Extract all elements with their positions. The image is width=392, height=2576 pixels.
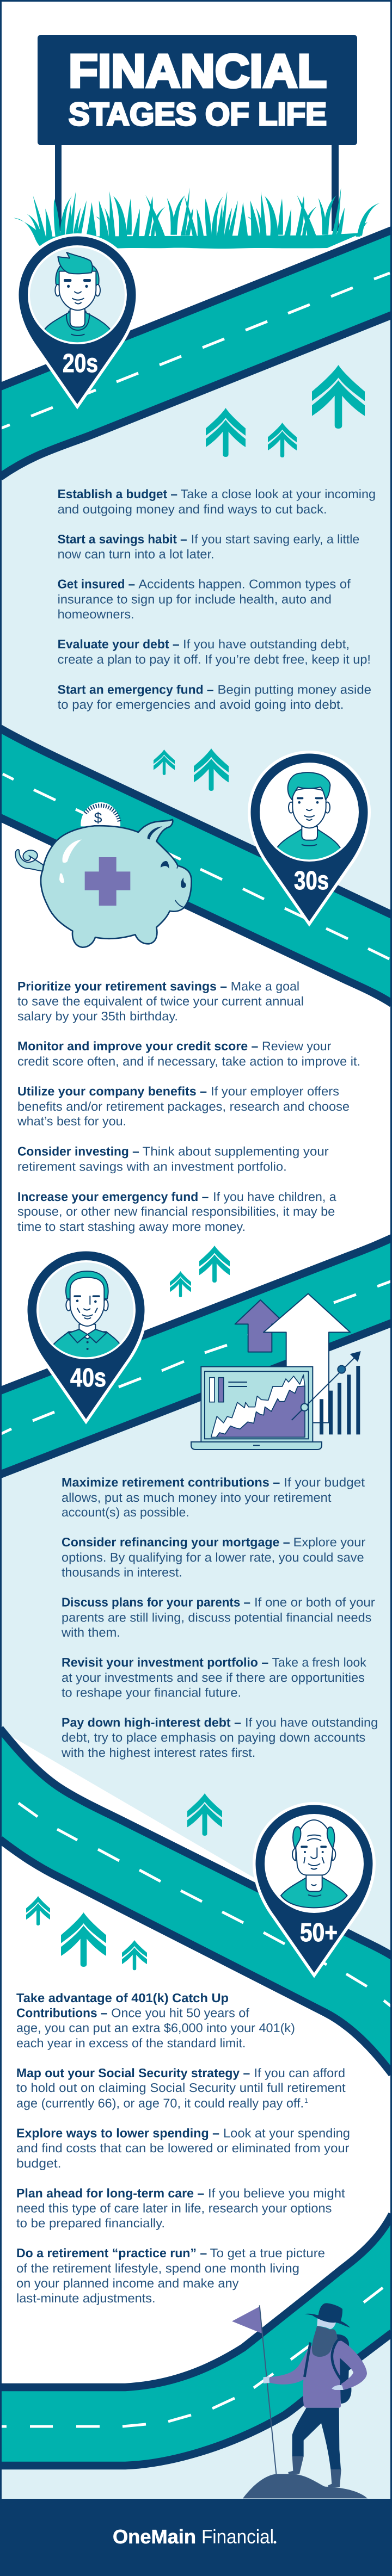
pig face [148, 826, 186, 888]
tip: credit score: credit score often, and if necessary, take action to improve it. [17, 1054, 360, 1068]
tip: social security: to hold out on claiming Social Security until full retirement [16, 2080, 346, 2095]
investment illustration [191, 1293, 361, 1450]
background: light blue band between 40s and 50s roads [0, 1316, 392, 1958]
backpack [336, 2334, 351, 2404]
hands [263, 2376, 344, 2390]
tip: catch up contributions: age, you can put an extra $6,000 into your 401(k) [16, 2021, 295, 2035]
logo: OneMain Financial: OneMain [113, 2525, 196, 2548]
pin label: 30s: 30s [294, 866, 329, 895]
pig cross [85, 857, 130, 906]
pig tail [15, 850, 43, 871]
tip: maximize contributions: If your budget [284, 1475, 365, 1489]
tip: increase emergency fund: time to start stashing away more money. [17, 1219, 246, 1234]
road: final stretch [0, 2214, 392, 2466]
tips: 40s [61, 1475, 378, 1760]
portrait: 40s [54, 1271, 120, 1368]
straps [304, 2339, 341, 2380]
tree: large [312, 365, 365, 429]
tip: increase emergency fund: spouse, or other new financial responsibilities, it may be [17, 1204, 335, 1218]
tip: social security [16, 2066, 346, 2110]
sign posts [55, 141, 339, 231]
footer bar [0, 2499, 392, 2576]
tip: get insured [58, 577, 351, 621]
tip: parents [61, 1595, 375, 1639]
tip: investing: Consider investing – [17, 1144, 139, 1159]
tree: medium top [187, 1793, 222, 1836]
tree: medium [206, 408, 246, 457]
tips: 20s [58, 487, 376, 711]
tip: maximize contributions: allows, put as much money into your retirement [62, 1490, 332, 1504]
legs [292, 2408, 341, 2469]
tip: evaluate debt: If you have outstanding debt, [183, 637, 350, 651]
background: light blue band under final road [0, 2328, 392, 2499]
tip: establish a budget: Establish a budget – [58, 487, 177, 501]
tip: portfolio: to reshape your financial future. [62, 1685, 241, 1699]
tip: parents: parents are still living, discuss potential financial needs [62, 1610, 371, 1624]
tip: catch up contributions: Contributions – [16, 2006, 108, 2020]
tip: catch up contributions: Take advantage of 401(k) Catch Up [16, 1991, 229, 2005]
tip: parents: If one or both of your [254, 1595, 375, 1609]
tree: small [154, 750, 175, 775]
tip: practice run [16, 2246, 325, 2305]
tip: lower spending: budget. [16, 2156, 61, 2170]
tip: long-term care: to be prepared financially. [16, 2216, 165, 2230]
tip: establish a budget: Take a close look at your incoming [181, 487, 376, 501]
tip: refinancing: options. By qualifying for a lower rate, you could save [62, 1550, 364, 1564]
pin label: 50+: 50+ [300, 1918, 338, 1947]
tip: lower spending: Explore ways to lower spending – [16, 2126, 219, 2140]
tip: practice run: of the retirement lifestyle, spend one month living [16, 2261, 299, 2275]
tip: retirement savings: Make a goal [231, 979, 299, 993]
tip: social security: If you can afford [254, 2066, 345, 2080]
pin label: 20s: 20s [63, 349, 98, 378]
tree: small [170, 1271, 191, 1297]
tree: medium [194, 748, 229, 791]
road: 50+ [0, 1729, 392, 2074]
tip: credit score [17, 1039, 360, 1068]
tip: practice run: Do a retirement “practice run” – [16, 2246, 207, 2260]
tip: high-interest debt [61, 1716, 378, 1760]
tip: long-term care: If you believe you might [208, 2186, 345, 2200]
pin label: 40s: 40s [70, 1364, 106, 1392]
tip: maximize contributions: account(s) as possible. [62, 1505, 189, 1519]
tip: credit score: Review your [262, 1039, 332, 1053]
tip: emergency fund: to pay for emergencies and avoid going into debt. [58, 697, 344, 711]
pig highlights [59, 839, 82, 883]
tip: company benefits: Utilize your company benefits – [17, 1084, 207, 1098]
tip: credit score: Monitor and improve your credit score – [17, 1039, 259, 1053]
tip: savings habit: Start a savings habit – [58, 532, 187, 546]
tip: long-term care: Plan ahead for long-term care – [16, 2186, 204, 2200]
tip: lower spending [16, 2126, 350, 2170]
tip: high-interest debt: Pay down high-interest debt – [62, 1716, 241, 1730]
pig body [41, 820, 192, 948]
tip: retirement savings: Prioritize your retirement savings – [17, 979, 227, 993]
road: 30s [0, 728, 392, 1004]
sign board [38, 35, 357, 145]
panel: 40s section [0, 1238, 392, 1760]
tip: practice run: on your planned income and make any [16, 2276, 239, 2290]
bar chart [320, 1366, 360, 1434]
tip: company benefits: If your employer offers [211, 1084, 339, 1098]
tip: emergency fund: Begin putting money aside [218, 682, 371, 696]
panel: 50+ section [0, 1729, 392, 2498]
tip: savings habit: now can turn into a lot later. [58, 547, 215, 561]
tree: large [61, 1912, 106, 1967]
tip: parents: with them. [61, 1625, 120, 1639]
tip: increase emergency fund [17, 1190, 336, 1234]
title line 2: STAGES OF LIFE [69, 96, 327, 132]
tip: increase emergency fund: Increase your emergency fund – [17, 1190, 209, 1204]
tree: small right [122, 1940, 147, 1970]
tip: portfolio [62, 1655, 366, 1699]
tip: emergency fund: Start an emergency fund – [58, 682, 214, 696]
tip: social security: 1 [304, 2097, 308, 2104]
tip: evaluate debt [58, 637, 371, 666]
white arrow [264, 1293, 350, 1423]
tip: high-interest debt: with the highest interest rates first. [61, 1745, 255, 1760]
tip: establish a budget: and outgoing money and find ways to cut back. [58, 502, 327, 516]
pin: 30s [250, 754, 368, 921]
tip: evaluate debt: create a plan to pay it off. If you’re debt free, keep it up! [58, 652, 371, 666]
tip: portfolio: Take a fresh look [272, 1655, 366, 1669]
tip: social security: Map out your Social Security strategy – [16, 2066, 250, 2080]
tip: evaluate debt: Evaluate your debt – [58, 637, 180, 651]
portrait: 20s [45, 252, 111, 353]
tip: lower spending: Look at your spending [223, 2126, 350, 2140]
tree: medium [199, 1246, 230, 1283]
logo: OneMain Financial [113, 2525, 277, 2548]
tip: get insured: Accidents happen. Common types of [138, 577, 351, 591]
tip: retirement savings: salary by your 35th birthday. [17, 1009, 178, 1023]
logo: OneMain Financial: Financial [201, 2525, 274, 2548]
tree: small [268, 423, 297, 457]
coin with dollar sign [81, 802, 120, 826]
tip: company benefits [17, 1084, 350, 1128]
panel: title sign [38, 35, 357, 231]
boots [288, 2456, 341, 2487]
piggy bank [15, 802, 192, 948]
road: 40s [0, 1238, 392, 1475]
tip: company benefits: benefits and/or retirement packages, research and choose [17, 1099, 350, 1113]
tip: practice run: last-minute adjustments. [16, 2291, 156, 2305]
tip: refinancing: thousands in interest. [62, 1565, 182, 1580]
tip: lower spending: and find costs that can be lowered or eliminated from your [16, 2141, 350, 2155]
tip: refinancing: Explore your [293, 1535, 366, 1549]
tip: retirement savings [17, 979, 304, 1023]
tip: high-interest debt: debt, try to place emphasis on paying down accounts [62, 1730, 365, 1744]
beard [312, 2326, 338, 2357]
flag [232, 2305, 276, 2474]
tip: retirement savings: to save the equivalent of twice your current annual [17, 994, 304, 1008]
tip: get insured: insurance to sign up for include health, auto and [58, 592, 332, 606]
tip: establish a budget [58, 487, 376, 516]
title line 1: FINANCIAL [69, 45, 327, 97]
road: 20s [0, 230, 392, 477]
tip: increase emergency fund: If you have children, a [213, 1190, 336, 1204]
tip: portfolio: at your investments and see if there are opportunities [62, 1670, 365, 1685]
tip: social security: age (currently 66), or age 70, it could really pay off. [16, 2096, 304, 2110]
tips: 30s [17, 979, 360, 1234]
tree: small left [26, 1896, 50, 1925]
tip: emergency fund [58, 682, 371, 711]
tip: investing: retirement savings with an investment portfolio. [17, 1160, 287, 1174]
tip: savings habit: If you start saving early, a little [191, 532, 359, 546]
tip: company benefits: what’s best for you. [17, 1114, 126, 1128]
background: light blue band between 20s and 30s roads [0, 305, 392, 925]
tip: parents: Discuss plans for your parents – [62, 1595, 250, 1609]
tip: savings habit [58, 532, 359, 561]
grass [14, 188, 380, 249]
pin: 40s [27, 1251, 145, 1419]
tip: refinancing: Consider refinancing your mortgage – [62, 1535, 290, 1549]
rock [243, 2474, 367, 2498]
tip: get insured: homeowners. [58, 607, 134, 621]
portrait: 50+ [281, 1820, 347, 1908]
tip: catch up contributions [16, 1991, 295, 2050]
tip: catch up contributions: each year in excess of the standard limit. [16, 2036, 246, 2050]
panel: 20s section [0, 230, 392, 711]
pin: 50+ [256, 1805, 372, 1973]
chart in screen [211, 1375, 305, 1437]
tip: catch up contributions: Once you hit 50 years of [111, 2006, 249, 2020]
coin with dollar sign: $ [94, 810, 102, 826]
hat [304, 2303, 350, 2327]
tip: refinancing [62, 1535, 366, 1580]
tip: long-term care: need this type of care later in life, research your options [16, 2201, 332, 2215]
hiker with flag on rock [232, 2303, 367, 2498]
tip: practice run: To get a true picture [210, 2246, 325, 2260]
tip: investing: Think about supplementing your [143, 1144, 329, 1159]
tip: maximize contributions [62, 1475, 365, 1519]
face [317, 2318, 336, 2329]
tip: maximize contributions: Maximize retirement contributions – [62, 1475, 280, 1489]
purple arrow [235, 1300, 285, 1352]
tips: 50+ [16, 1991, 350, 2305]
tip: high-interest debt: If you have outstanding [245, 1716, 378, 1730]
pin: 20s [19, 236, 136, 404]
laptop [191, 1367, 322, 1450]
tip: portfolio: Revisit your investment portfolio – [62, 1655, 268, 1669]
tip: long-term care [16, 2186, 345, 2230]
torso and arms [270, 2340, 367, 2408]
tip: investing [17, 1144, 329, 1174]
trend line [292, 1351, 361, 1420]
panel: 30s section [0, 728, 392, 1234]
portrait: 30s [277, 772, 340, 870]
tip: get insured: Get insured – [58, 577, 135, 591]
